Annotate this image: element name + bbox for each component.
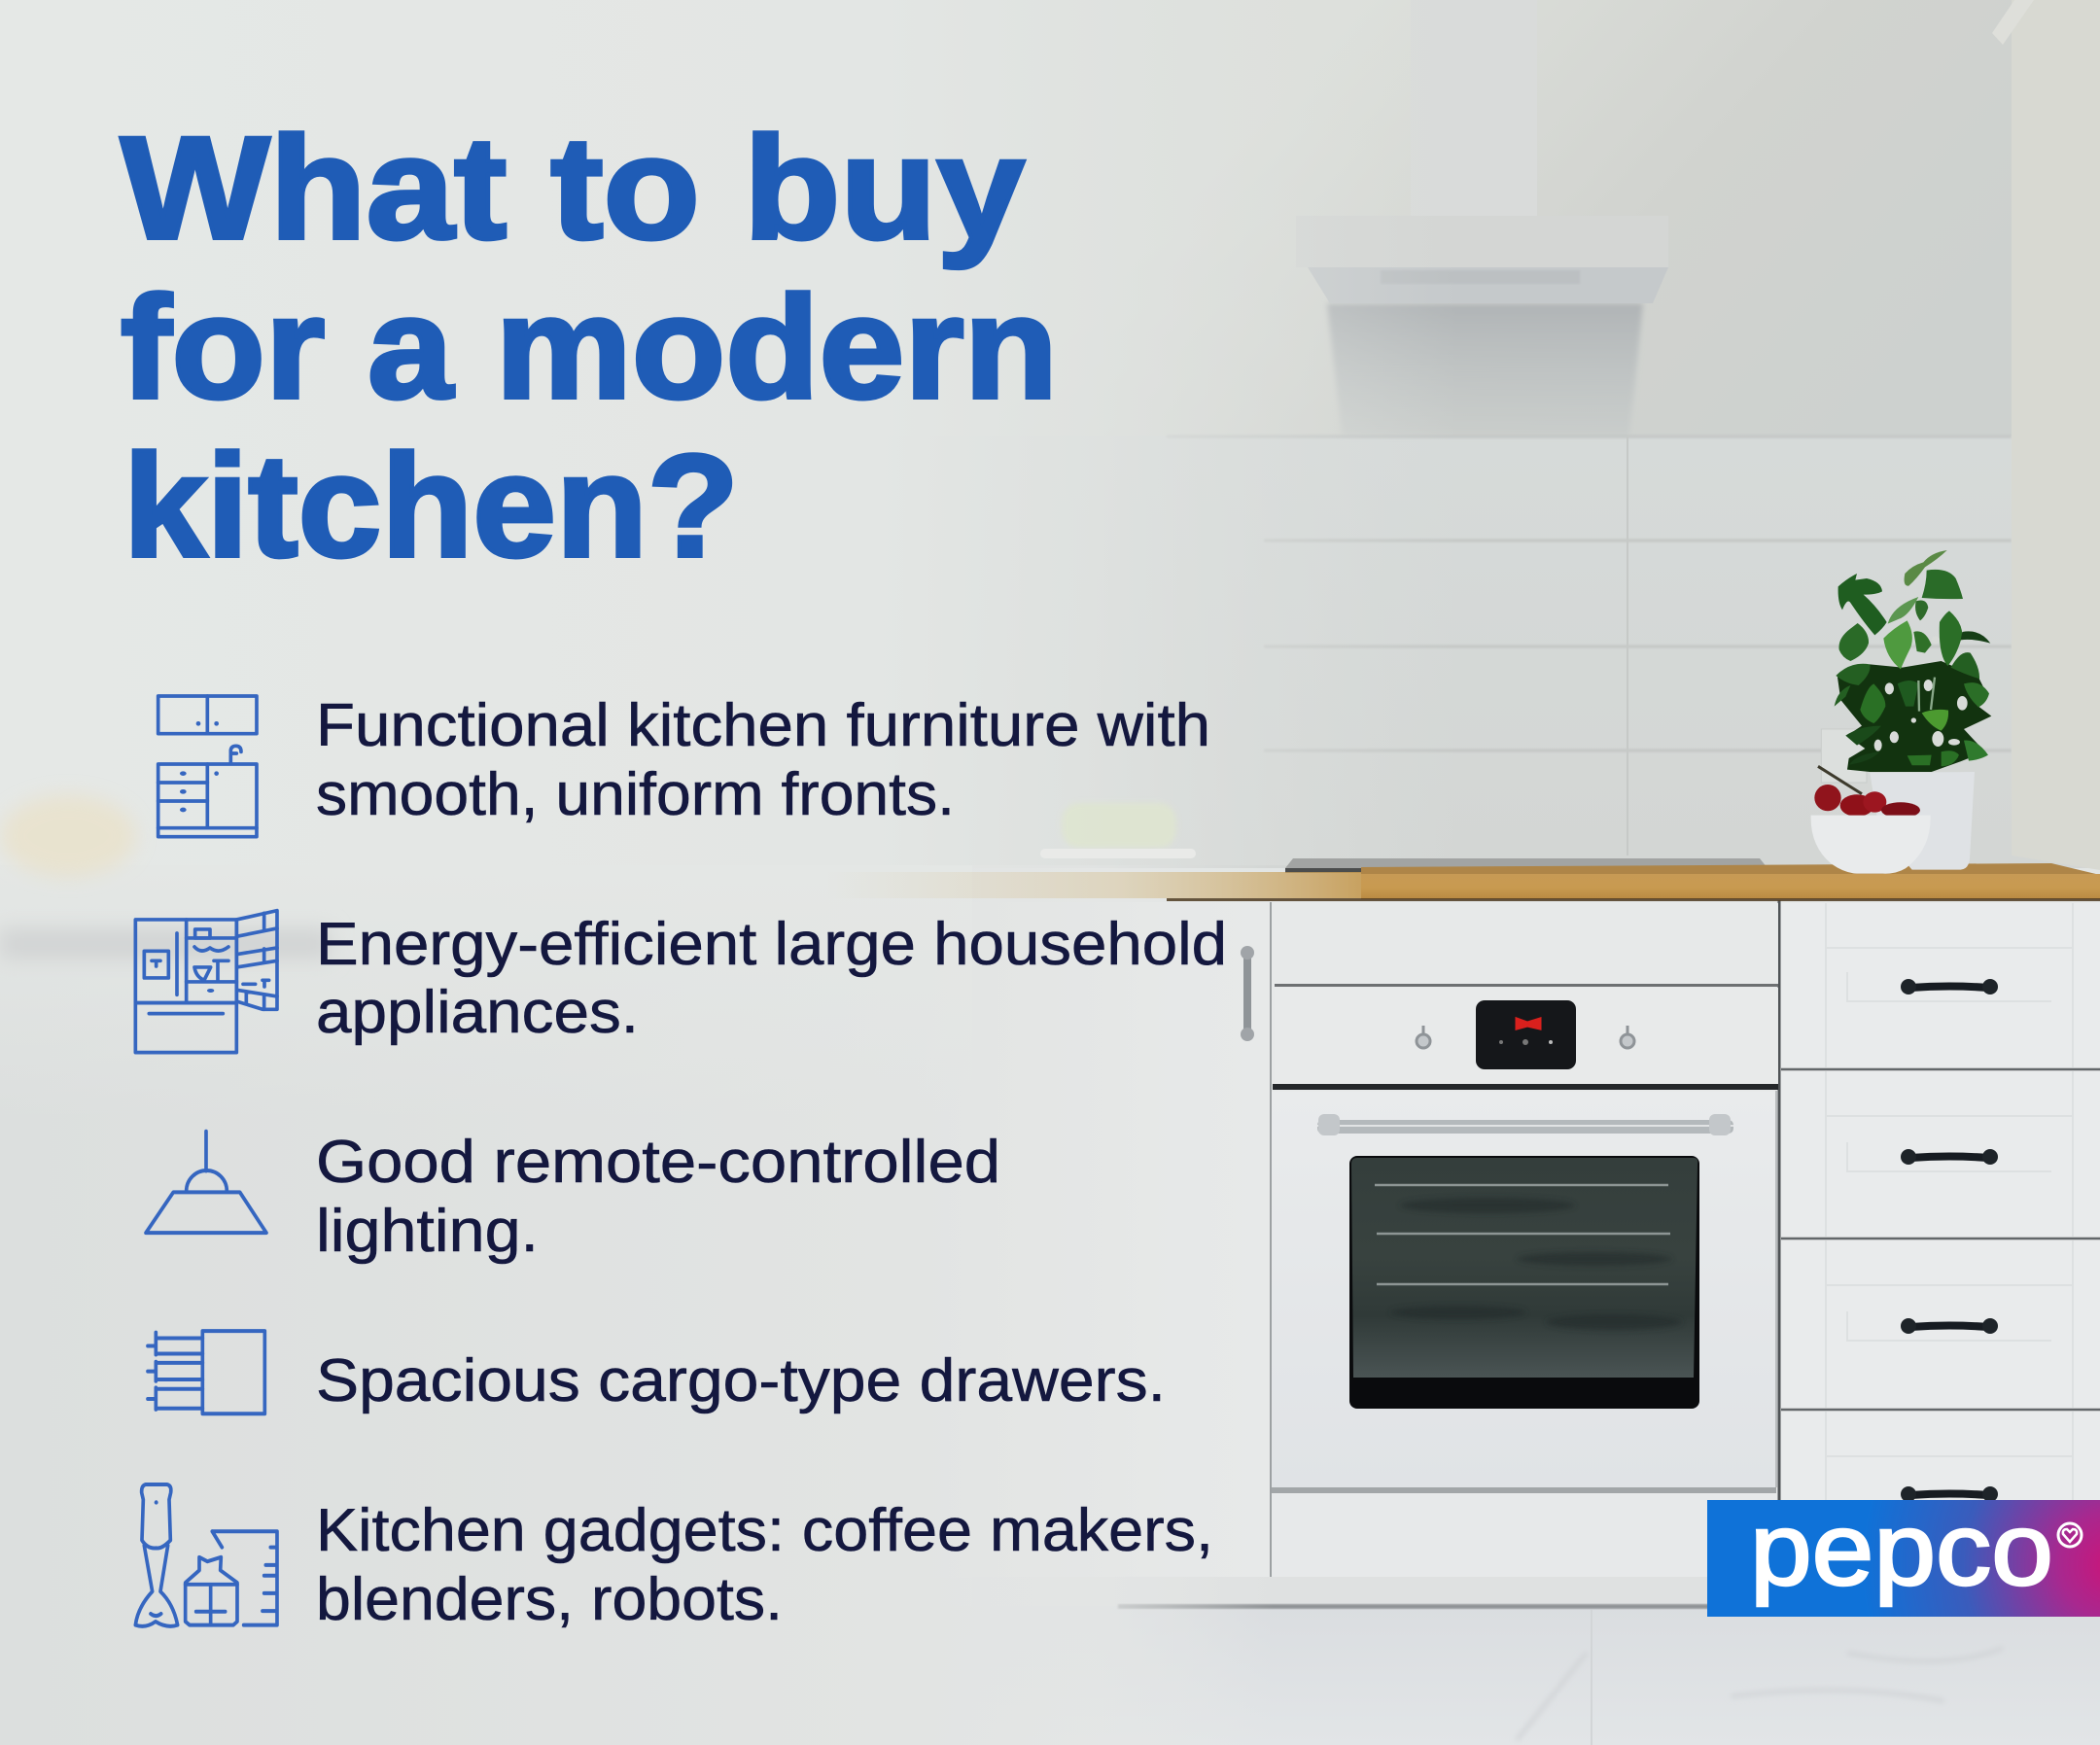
ceiling moulding <box>1992 0 2034 45</box>
text <box>316 1497 1213 1633</box>
icon: kitchen cabinets <box>158 696 257 837</box>
text <box>316 911 1227 1046</box>
base cabinets <box>0 902 2100 1578</box>
text: lighting. <box>316 1198 539 1265</box>
item 2: household appliances <box>135 911 1227 1053</box>
text <box>316 1129 1000 1265</box>
wall tiles <box>0 436 2100 868</box>
left cabinet handle <box>1241 946 1254 1041</box>
oven <box>1272 903 1778 1577</box>
icon: blender and jug <box>135 1484 277 1626</box>
oven handle <box>1317 1120 1733 1134</box>
title <box>121 106 1058 587</box>
title: for a modern <box>121 265 1058 429</box>
drawer handles <box>1910 986 1988 1495</box>
tomatoes <box>1818 766 1862 794</box>
right side wall <box>2012 0 2100 870</box>
text <box>316 692 1210 828</box>
item 5: kitchen gadgets <box>135 1484 1213 1633</box>
floor <box>0 1604 2100 1745</box>
oven knobs <box>1417 1026 1634 1048</box>
icon: pendant lamp <box>146 1132 266 1233</box>
oven window <box>1349 1156 1699 1409</box>
text: Kitchen gadgets: coffee makers, <box>316 1497 1213 1564</box>
text: Spacious cargo-type drawers. <box>316 1347 1166 1414</box>
text: Good remote-controlled <box>316 1129 1000 1196</box>
bowl <box>1811 816 1931 874</box>
worktop <box>826 863 2100 901</box>
right drawers <box>1779 900 2100 1616</box>
item 4: cargo drawers <box>148 1331 1166 1414</box>
item 3: lighting <box>146 1129 1000 1265</box>
logo: pepco <box>1707 1492 2100 1617</box>
text: Energy-efficient large household <box>316 911 1227 978</box>
title: kitchen? <box>123 424 739 587</box>
item 1: kitchen furniture <box>158 692 1210 837</box>
range hood <box>1296 0 1668 436</box>
title: What to buy <box>121 106 1025 269</box>
plant pot <box>1870 772 1975 870</box>
text: appliances. <box>316 979 639 1046</box>
icon: open fridge <box>135 911 277 1053</box>
text: blenders, robots. <box>316 1566 783 1633</box>
wall <box>0 0 2100 437</box>
text: smooth, uniform fronts. <box>316 761 955 828</box>
socket <box>1821 729 1867 783</box>
text: Functional kitchen furniture with <box>316 692 1210 759</box>
hob <box>1285 858 1768 873</box>
logo: pepco: pepco <box>1750 1492 2053 1607</box>
plinth <box>972 1577 2100 1606</box>
left translucent overlay <box>0 0 1458 1745</box>
oven control display <box>1476 1000 1576 1069</box>
icon: pull-out drawers <box>148 1331 264 1413</box>
icon: heart badge <box>2058 1523 2082 1547</box>
plant <box>1811 550 1991 874</box>
